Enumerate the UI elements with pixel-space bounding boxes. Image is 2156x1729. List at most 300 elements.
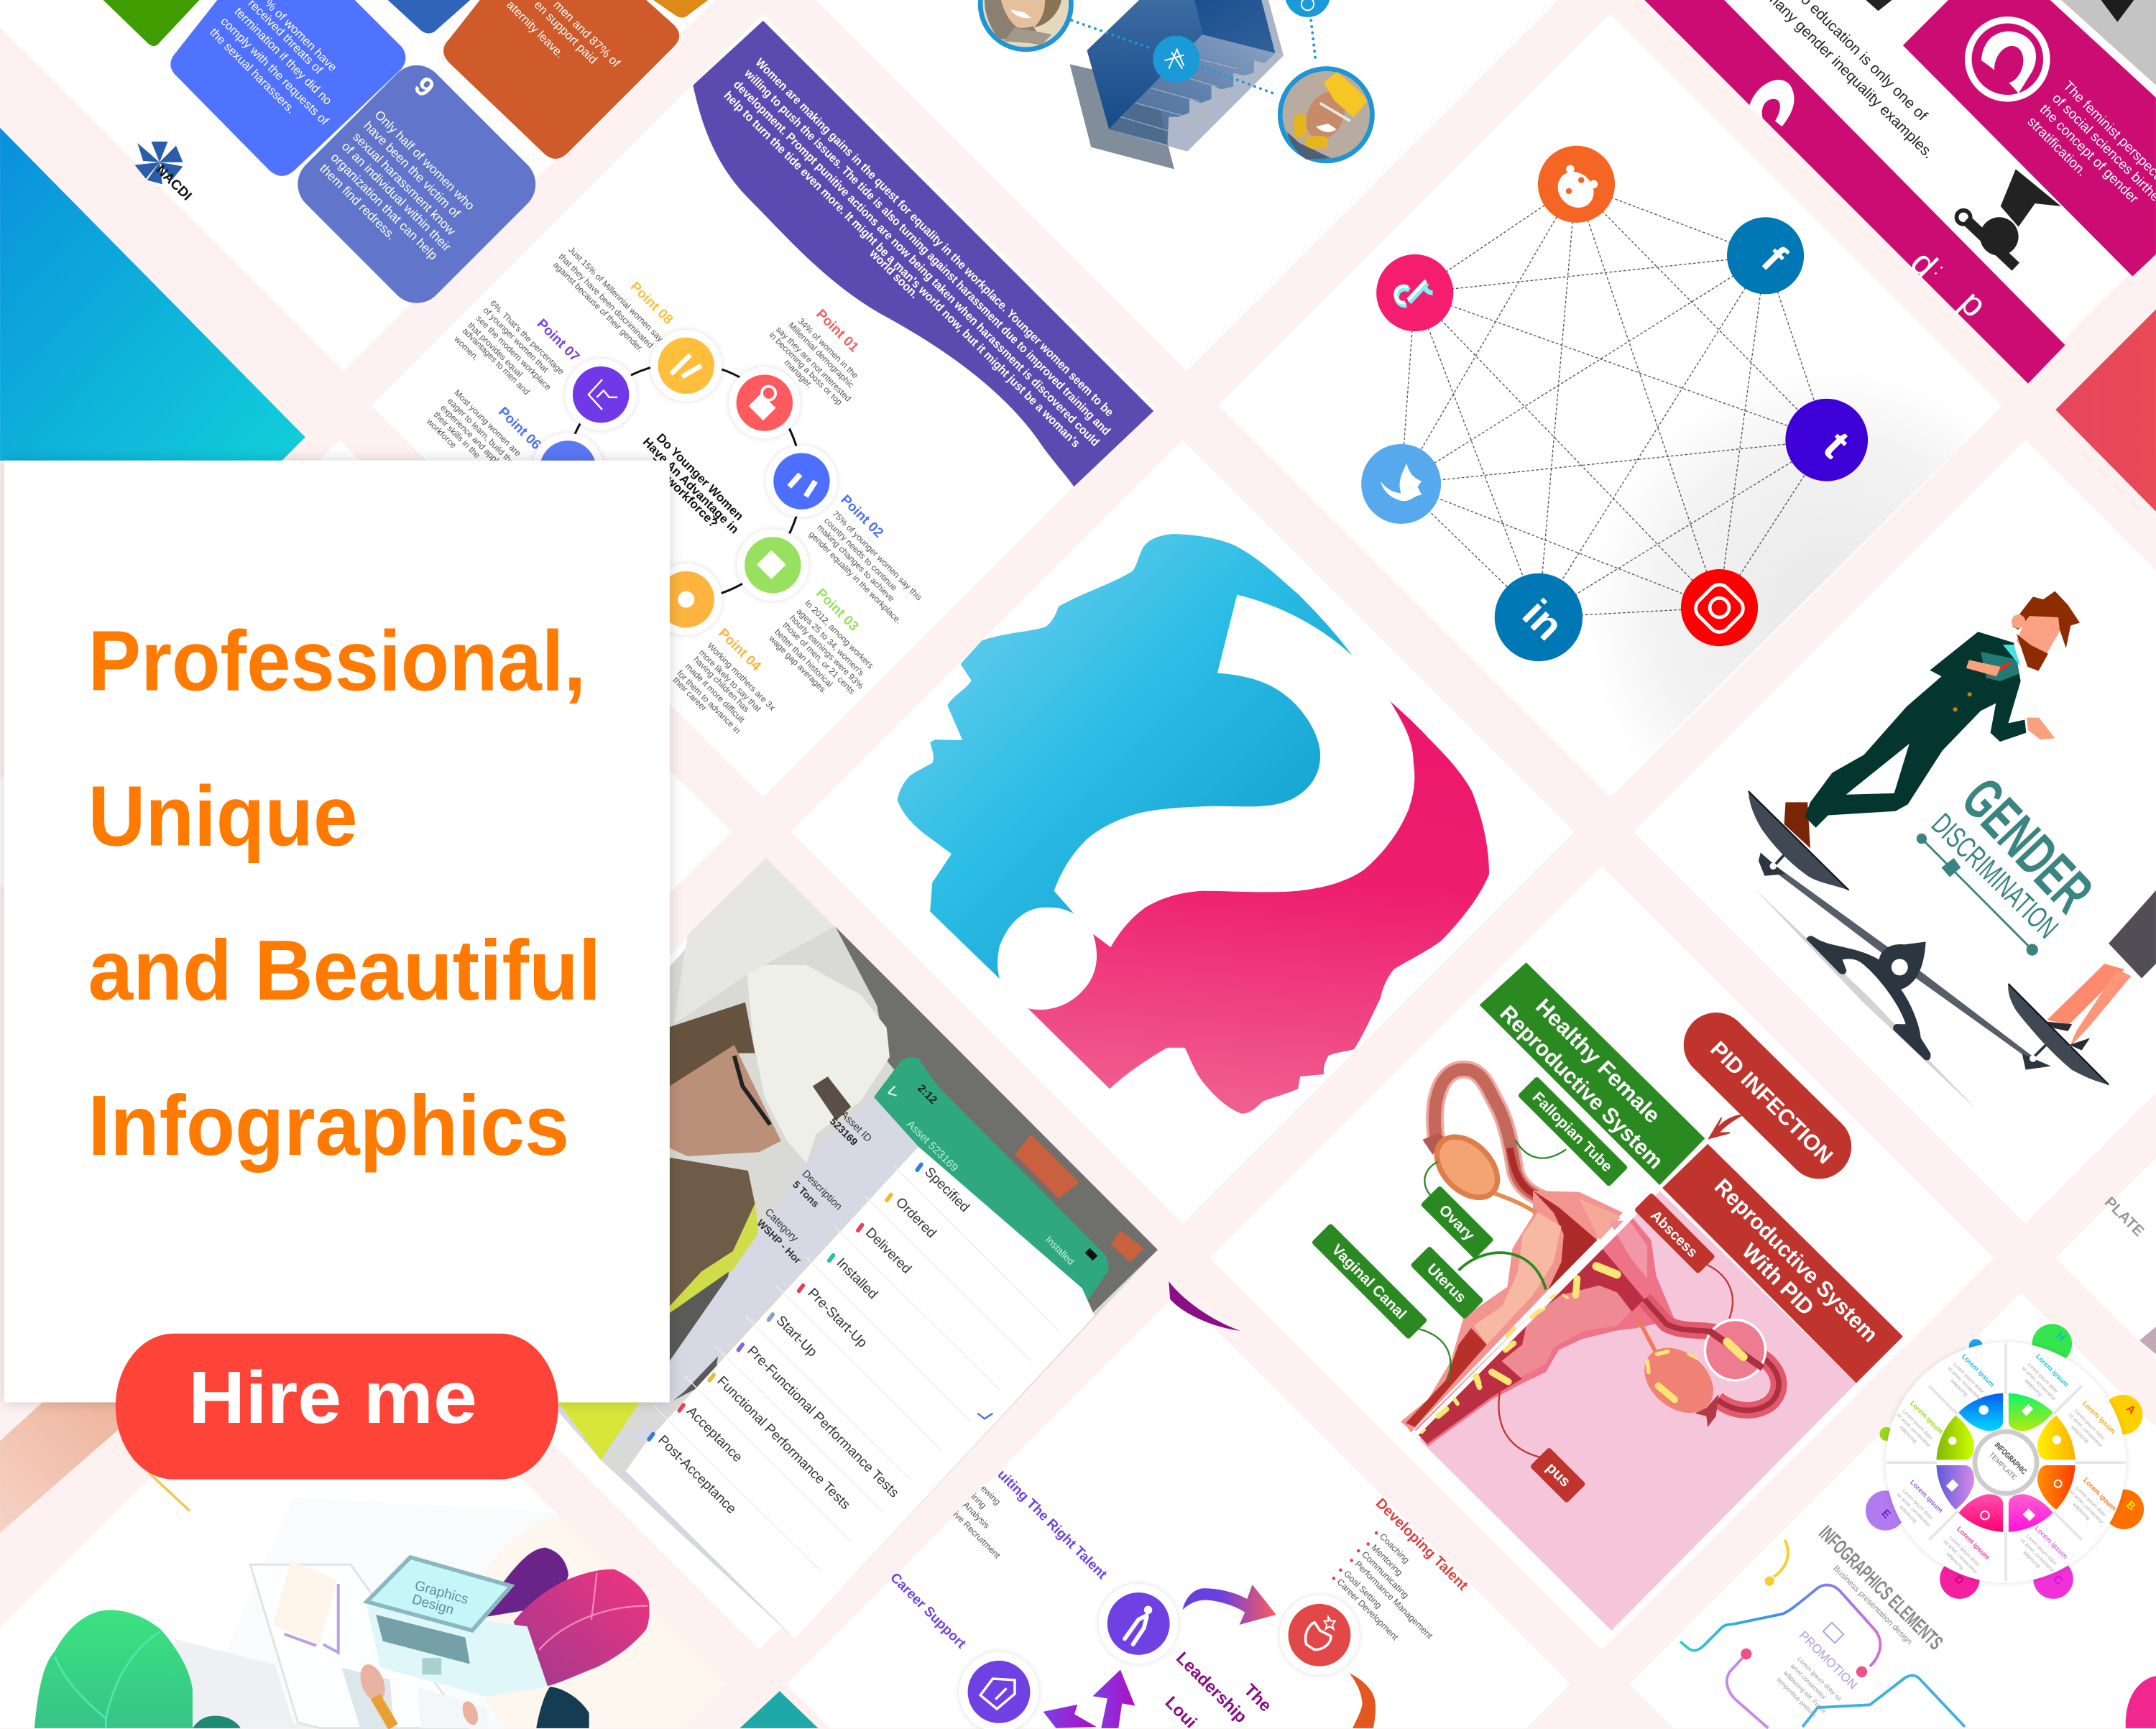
banner text: development. Prompt punitive actions are now being taken when harassment is discovered could	[731, 78, 1102, 449]
glyphs on band: :	[1930, 260, 1949, 279]
card: periwinkle statistic: 9	[408, 70, 441, 103]
point labels: Point 06	[495, 405, 544, 453]
button: hire me	[116, 1334, 558, 1480]
point labels: Point 04	[715, 626, 764, 674]
heading: and Beautiful	[88, 923, 601, 1018]
yellow line	[149, 1472, 190, 1511]
panel: gender discrimination tile	[1749, 591, 2156, 1110]
developing list	[1335, 1531, 1435, 1643]
heading: Professional,	[88, 614, 586, 709]
line: pink to purple	[1727, 1649, 1768, 1728]
drawing pad	[341, 1667, 395, 1728]
green app header: Asset 523169	[904, 1118, 960, 1174]
orange arc	[1350, 1673, 1376, 1728]
notebook	[418, 1687, 489, 1728]
card: periwinkle statistic: of an individual within their	[339, 139, 454, 254]
sector body text: sit amet, consectetur	[1895, 1413, 1932, 1449]
sector body text: adipiscing	[1898, 1425, 1917, 1444]
banner text: Women are making gains in the quest for equality in the workplace. Younger women seem to be	[753, 55, 1116, 419]
band: lower magenta	[1644, 0, 2065, 384]
panel: plate fragment: PLATE	[2101, 1194, 2147, 1240]
green banner: Reproductive System	[1495, 1001, 1668, 1174]
icon: reddit	[1538, 146, 1615, 223]
outer tab letters: D	[1952, 1573, 1966, 1587]
skateboard right	[2008, 984, 2109, 1084]
soft grey shadow	[1554, 344, 1999, 795]
dotted connectors	[1072, 20, 1316, 95]
arrow: pill to banners	[1709, 1115, 1742, 1138]
lorem text: Lorem ipsum dolor sit	[1796, 1656, 1843, 1702]
pink circle fragment	[2126, 1676, 2156, 1728]
card: small orange	[653, 0, 708, 17]
green app header: 2:12	[915, 1082, 939, 1107]
asset details	[754, 1109, 874, 1267]
photo background	[413, 858, 1158, 1638]
sector body text: Lorem ipsum dolor	[1952, 1362, 1985, 1395]
outer tab letters: B	[2124, 1499, 2138, 1513]
icon: person purple	[1099, 1584, 1179, 1664]
sector body text: sit amet, consectetur	[1942, 1539, 1978, 1575]
sector body text: Lorem ipsum dolor	[1901, 1488, 1934, 1521]
asset details: 523169	[827, 1116, 860, 1148]
band: upper magenta	[1903, 0, 2156, 277]
green app header: Installed	[1044, 1234, 1077, 1267]
banner: purple curved	[693, 21, 1153, 487]
sector labels: Lorem ipsum	[2081, 1477, 2117, 1513]
icon: woman head	[1749, 80, 1795, 126]
panel: sexual harassment statistics tile	[103, 0, 708, 315]
card: periwinkle statistic: them find redress.	[317, 161, 399, 243]
worker vest	[670, 1200, 758, 1322]
card: green	[103, 0, 199, 46]
teal arrow line	[1917, 834, 2037, 954]
sector labels: Lorem ipsum	[2081, 1400, 2116, 1436]
point descriptions: 6%. That's the percentage	[488, 298, 566, 377]
point descriptions: Just 15% of Millennial women say	[566, 244, 665, 344]
point 08 icon	[650, 330, 722, 402]
icon: instagram	[1681, 569, 1758, 646]
purple sliver	[1169, 1281, 1240, 1331]
heading: leadership: The	[1240, 1680, 1275, 1716]
label: Uterus	[1410, 1246, 1484, 1319]
sector body text: sit amet, consectetur	[2069, 1490, 2105, 1526]
point descriptions: in becoming a boss or top	[767, 330, 844, 407]
outer tab letters: H	[2053, 1329, 2068, 1344]
label: pus	[1529, 1447, 1586, 1503]
point descriptions: more likely to say that	[697, 647, 764, 714]
heading: Infographics	[88, 1079, 569, 1174]
heading: promotion: PROMOTION	[1797, 1628, 1861, 1692]
point descriptions: 75% of younger women say this	[830, 509, 924, 602]
developing bullets	[1332, 1531, 1378, 1580]
developing list: Mentoring	[1369, 1542, 1404, 1577]
point descriptions: manager.	[782, 357, 815, 390]
panel: PID reproductive system tile	[1311, 962, 1903, 1631]
sketch board	[250, 1564, 468, 1728]
recruiting list: ive Recruitment	[952, 1510, 1003, 1561]
panel: white promo card	[4, 461, 670, 1402]
panel: magenta feminist perspective tile	[1644, 0, 2156, 384]
panel: infographics elements tile	[1680, 1521, 2156, 1728]
card: orange-red statistic: men and 87% of	[550, 0, 623, 70]
lorem text	[1775, 1656, 1843, 1718]
lower grey edge	[619, 1471, 795, 1638]
grey details panel	[550, 1097, 918, 1460]
seesaw pivot	[1806, 936, 1930, 1060]
card: dark blue	[388, 0, 470, 33]
red banner: With PID	[1737, 1239, 1819, 1320]
logo: NACDI	[135, 142, 194, 204]
label: Fallopian Tube: Fallopian Tube	[1529, 1089, 1616, 1175]
printer and laptop: Graphics	[413, 1578, 470, 1608]
icon: tiktok	[1376, 254, 1453, 331]
sector labels: Lorem ipsum	[1955, 1526, 1991, 1562]
sector body text: Lorem ipsum dolor	[2075, 1485, 2107, 1518]
banner text: world soon.	[867, 246, 921, 301]
icon: envelope	[1823, 1623, 1843, 1643]
icon: facebook: f	[1753, 237, 1795, 280]
red banner: Reproductive System	[1710, 1174, 1882, 1347]
recruiting list	[952, 1483, 1003, 1561]
title DISCRIMINATION: DISCRIMINATION	[1925, 807, 2065, 944]
label: Fallopian Tube	[1517, 1076, 1628, 1187]
status list: Post-Acceptance	[655, 1433, 739, 1517]
panel: site worker and phone app tile	[413, 858, 1158, 1638]
status list: Specified	[921, 1165, 972, 1215]
centre hub: INFOGRAPHIC	[1993, 1441, 2028, 1476]
point descriptions: see the modern workplace	[474, 313, 553, 392]
point descriptions: hourly earnings were 93%	[788, 613, 866, 691]
heading: leadership: Leadership	[1172, 1649, 1250, 1727]
pencil	[375, 1697, 393, 1727]
point descriptions: gender equality in the workplace.	[807, 529, 903, 626]
centre question: The workforce?	[645, 455, 721, 530]
axle right	[2024, 1042, 2049, 1069]
sector body text: adipiscing	[2022, 1550, 2041, 1569]
point labels: Point 08	[627, 280, 676, 328]
label: Abscess: Abscess	[1647, 1207, 1700, 1260]
icon: compass circle	[1153, 36, 1199, 83]
point labels: Point 07	[534, 316, 582, 365]
label: Uterus: Uterus	[1424, 1260, 1469, 1306]
sector labels: Lorem ipsum	[2034, 1352, 2070, 1389]
subtitle: Business presentation design	[1831, 1564, 1914, 1646]
PID infection pill: PID INFECTION	[1705, 1037, 1838, 1168]
sector labels	[1908, 1352, 2117, 1562]
point descriptions: advantages to men and	[461, 326, 532, 397]
status list: Acceptance	[683, 1404, 745, 1465]
worker hair	[670, 1002, 755, 1100]
label: Ovary	[1420, 1185, 1494, 1259]
card: periwinkle statistic: Only half of women who	[372, 107, 478, 213]
green leaf	[34, 1610, 193, 1728]
line: yellow	[1765, 1540, 1788, 1586]
organ: infected side	[1415, 1215, 1779, 1447]
tile: red gradient	[2055, 309, 2156, 512]
arrow: purple to red	[1182, 1585, 1276, 1625]
worker mesh	[670, 1272, 729, 1402]
line: teal to pink	[1680, 1585, 1880, 1677]
teal triangle	[740, 1691, 818, 1728]
sector body text: Lorem ipsum dolor	[2025, 1534, 2058, 1567]
pale peach circle	[468, 1515, 727, 1728]
centre hub	[1975, 1431, 2037, 1493]
panel: leadership talent tile	[887, 1281, 1471, 1729]
point descriptions: wage gap averages.	[767, 633, 829, 696]
sector body text: adipiscing	[2024, 1378, 2042, 1398]
lorem text: temporibus pretium	[1775, 1676, 1818, 1718]
recruiting list: iring	[969, 1492, 988, 1511]
status list: Start-Up	[773, 1313, 820, 1360]
point descriptions: experience and apply	[438, 402, 504, 468]
button: hire me: Hire me	[188, 1355, 477, 1439]
point descriptions: In 2012, among workers	[803, 598, 875, 670]
asset details: Asset ID	[838, 1109, 874, 1145]
sector labels: Lorem ipsum	[1960, 1352, 1996, 1389]
point descriptions: say they are not interested	[774, 324, 853, 404]
glyphs on band	[1903, 242, 1995, 325]
outer tab letters: A	[2124, 1403, 2138, 1417]
point labels: Point 03	[813, 586, 862, 635]
point descriptions: Most young women are	[452, 387, 523, 458]
point descriptions	[424, 244, 924, 736]
point descriptions: against because of their gender.	[551, 259, 645, 354]
status list: Pre-Functional Performance Tests	[744, 1343, 901, 1500]
sector body text: Lorem ipsum dolor	[1948, 1535, 1981, 1568]
arrows: green labels	[1415, 1140, 1566, 1380]
point descriptions: women.	[452, 333, 481, 363]
arrows: red labels	[1498, 1263, 1733, 1457]
green app header	[874, 1057, 1109, 1310]
right hand	[460, 1699, 481, 1727]
developing list: Career Development	[1335, 1577, 1401, 1643]
heading	[88, 614, 601, 1174]
sector body text: adipiscing	[2070, 1425, 2089, 1444]
worker lower hair	[670, 1158, 755, 1306]
status list: Installed	[834, 1255, 880, 1302]
sector body text: Lorem ipsum dolor	[2073, 1408, 2106, 1442]
3D stair shape	[1070, 0, 1284, 169]
card: periwinkle statistic: sexual harassment know	[350, 129, 459, 238]
point descriptions: Millennial demographic	[786, 321, 856, 390]
peach gradient strip	[0, 1401, 120, 1533]
card: periwinkle statistic: have been the victim of	[361, 119, 463, 221]
hard hat	[747, 965, 890, 1163]
pink leaf	[513, 1569, 650, 1687]
point descriptions: for them to advance in	[675, 668, 742, 736]
sector body text: adipiscing	[1945, 1552, 1964, 1571]
feminist perspective text: the concept of gender	[2037, 102, 2142, 207]
glyphs on band: p	[1953, 282, 1995, 325]
wall highlight	[674, 858, 834, 1024]
panel: question mark heads logo tile	[898, 534, 1489, 1114]
point 02 icon	[766, 446, 837, 517]
developing list: Coaching	[1378, 1531, 1411, 1565]
card: periwinkle statistic: organization that can help	[328, 150, 441, 262]
asset details: 5 Tons	[790, 1179, 821, 1210]
label: Ovary: Ovary	[1436, 1202, 1478, 1244]
developing list: Goal Setting	[1342, 1569, 1383, 1610]
point descriptions: Working mothers are 3x	[705, 640, 778, 713]
icon: linkedin: in	[1514, 591, 1572, 649]
printer and laptop: Design	[410, 1592, 456, 1618]
worker glasses	[734, 1056, 770, 1125]
line: blue to green	[1802, 1675, 1965, 1727]
heading: career support: Career Support	[887, 1570, 969, 1652]
glyphs on band: d	[1903, 242, 1945, 285]
icon: facebook	[1727, 217, 1804, 294]
centre question: Do Younger Women	[654, 430, 747, 523]
icon: graduate with diploma	[1957, 169, 2061, 267]
background dark worksite strip	[835, 926, 1158, 1314]
point descriptions: of younger women that	[481, 305, 550, 375]
point descriptions: workforce	[424, 416, 459, 451]
centre hub: TEMPLATE	[1987, 1451, 2018, 1482]
point 03 icon	[737, 530, 808, 601]
skateboard left	[1749, 791, 1849, 890]
status list: Delivered	[862, 1225, 914, 1277]
blue profile	[898, 534, 1353, 979]
sector body text: sit amet, consectetur	[1895, 1493, 1932, 1529]
icon: tumblr: t	[1814, 422, 1859, 467]
status list: Pre-Start-Up	[805, 1286, 870, 1351]
block: black fragment	[1866, 0, 1892, 11]
outer tabs	[1866, 1324, 2144, 1599]
label: Abscess	[1634, 1192, 1715, 1274]
panel: social media network tile	[1361, 146, 1999, 795]
background orange equipment	[1015, 1134, 1144, 1262]
point descriptions: making changes to achieve	[815, 522, 897, 604]
outer tab letters	[1879, 1329, 2138, 1587]
inner petals	[1936, 1393, 2076, 1532]
heading: Unique	[88, 770, 358, 864]
sector body text: sit amet, consectetur	[2019, 1538, 2055, 1574]
worker face	[670, 1045, 781, 1156]
chevron	[977, 1414, 992, 1419]
sector labels: Lorem ipsum	[1908, 1400, 1944, 1436]
point 01 icon	[729, 367, 801, 438]
printer and laptop	[367, 1557, 548, 1696]
developing list: Performance Management	[1353, 1559, 1435, 1641]
card background	[4, 461, 670, 1402]
sector labels: Lorem ipsum	[1908, 1479, 1944, 1515]
green banner: Healthy Female	[1531, 994, 1665, 1128]
icon: twitter	[1361, 444, 1441, 524]
point descriptions: their skills in the	[432, 410, 482, 461]
purple leaf	[486, 1548, 568, 1617]
portrait: woman	[980, 0, 1071, 50]
icon: linkedin	[1495, 573, 1583, 661]
arrows: purple fork	[1044, 1670, 1135, 1728]
pink disease area	[1419, 1191, 1856, 1631]
point descriptions: having children has	[691, 655, 751, 714]
recruiting list: ewing	[979, 1483, 1003, 1507]
point descriptions: their career	[671, 675, 709, 713]
card: periwinkle statistic	[286, 54, 547, 315]
sector body text	[1895, 1362, 2107, 1575]
pink profile	[1028, 701, 1489, 1114]
organ: healthy side	[1401, 1069, 1623, 1433]
panel: younger women in the workplace tile	[424, 21, 1153, 736]
lorem text: adipiscing elit. Fusce	[1782, 1669, 1828, 1715]
point descriptions: eager to learn, build their	[446, 396, 520, 471]
point labels: Point 01	[813, 307, 862, 356]
point labels	[495, 280, 886, 674]
outer tab letters: E	[1879, 1507, 1893, 1521]
tile: blue gradient	[0, 128, 305, 461]
point 04 icon	[650, 563, 722, 635]
card: blue statistic: comply with the requests of	[218, 14, 331, 128]
pus deposits	[1422, 1266, 1697, 1433]
point 06 icon	[532, 433, 604, 504]
dashed network lines	[1401, 184, 1828, 617]
point descriptions: country needs to continue	[822, 515, 900, 593]
point labels: Point 02	[837, 492, 886, 541]
sector body text: sit amet, consectetur	[2021, 1366, 2057, 1402]
seesaw shadow	[1755, 890, 1977, 1110]
sector body text: sit amet, consectetur	[2068, 1413, 2104, 1449]
wheel spokes	[1886, 1343, 2126, 1581]
sector body text: Lorem ipsum dolor	[2027, 1362, 2059, 1395]
ring of eight points	[532, 330, 837, 635]
logo: NACDI: NACDI	[153, 162, 194, 204]
centre question: Have An Advantage in	[640, 435, 742, 536]
card: blue statistic: the sexual harassers.	[207, 25, 298, 116]
panel: graphics design tile	[0, 1401, 818, 1728]
wheel disc	[1886, 1342, 2126, 1583]
sector body text: adipiscing	[1949, 1378, 1968, 1398]
panel: infographic wheel tile	[1866, 1324, 2144, 1599]
heading: recruiting: uiting The Right Talent	[995, 1467, 1110, 1582]
sector labels: Lorem ipsum	[2033, 1525, 2069, 1561]
portrait: worker	[1280, 69, 1372, 161]
label: Vaginal Canal	[1311, 1223, 1428, 1340]
status list: Functional Performance Tests	[714, 1373, 853, 1513]
lorem text: amet consectetur	[1789, 1662, 1828, 1701]
sector body text: adipiscing	[1898, 1505, 1917, 1524]
seesaw bar	[1771, 863, 2032, 1061]
developing list: Communicating	[1360, 1549, 1411, 1600]
icon: handshake purple	[959, 1652, 1038, 1729]
white list sheet	[626, 1147, 1095, 1638]
point descriptions: better than historical	[773, 627, 835, 689]
sketch page	[273, 1561, 338, 1653]
sector body text: Lorem ipsum dolor	[1901, 1408, 1934, 1442]
asset details: Description	[800, 1168, 844, 1212]
label: pus: pus	[1543, 1460, 1574, 1490]
banner text: willing to push the issues. The tide is also turning against harassment due to improved training and	[742, 66, 1113, 438]
point descriptions: made it more difficult	[683, 661, 747, 725]
status list	[649, 1164, 972, 1517]
panel: corner fragment grey-pink	[2139, 1327, 2156, 1354]
icon: clock circle	[1285, 0, 1330, 17]
green banner	[1480, 962, 1705, 1185]
card: blue statistic	[170, 0, 405, 176]
icon: red hand with star	[1279, 1595, 1359, 1675]
panel: blue stairs with portraits tile	[980, 0, 1372, 169]
abscess magnifier	[1705, 1320, 1766, 1380]
white divider	[1414, 1188, 1659, 1437]
heading: leadership	[1161, 1649, 1275, 1729]
icon: tumblr	[1785, 399, 1868, 481]
point descriptions: that they have been discriminated	[557, 252, 655, 350]
hand	[356, 1661, 390, 1705]
card: orange-red statistic	[443, 0, 679, 159]
title: INFOGRAPHICS ELEMENTS	[1814, 1521, 1947, 1654]
point 07 icon	[565, 359, 637, 430]
asset details: WSHP - Hor	[754, 1217, 803, 1267]
label: Vaginal Canal: Vaginal Canal	[1328, 1241, 1409, 1322]
